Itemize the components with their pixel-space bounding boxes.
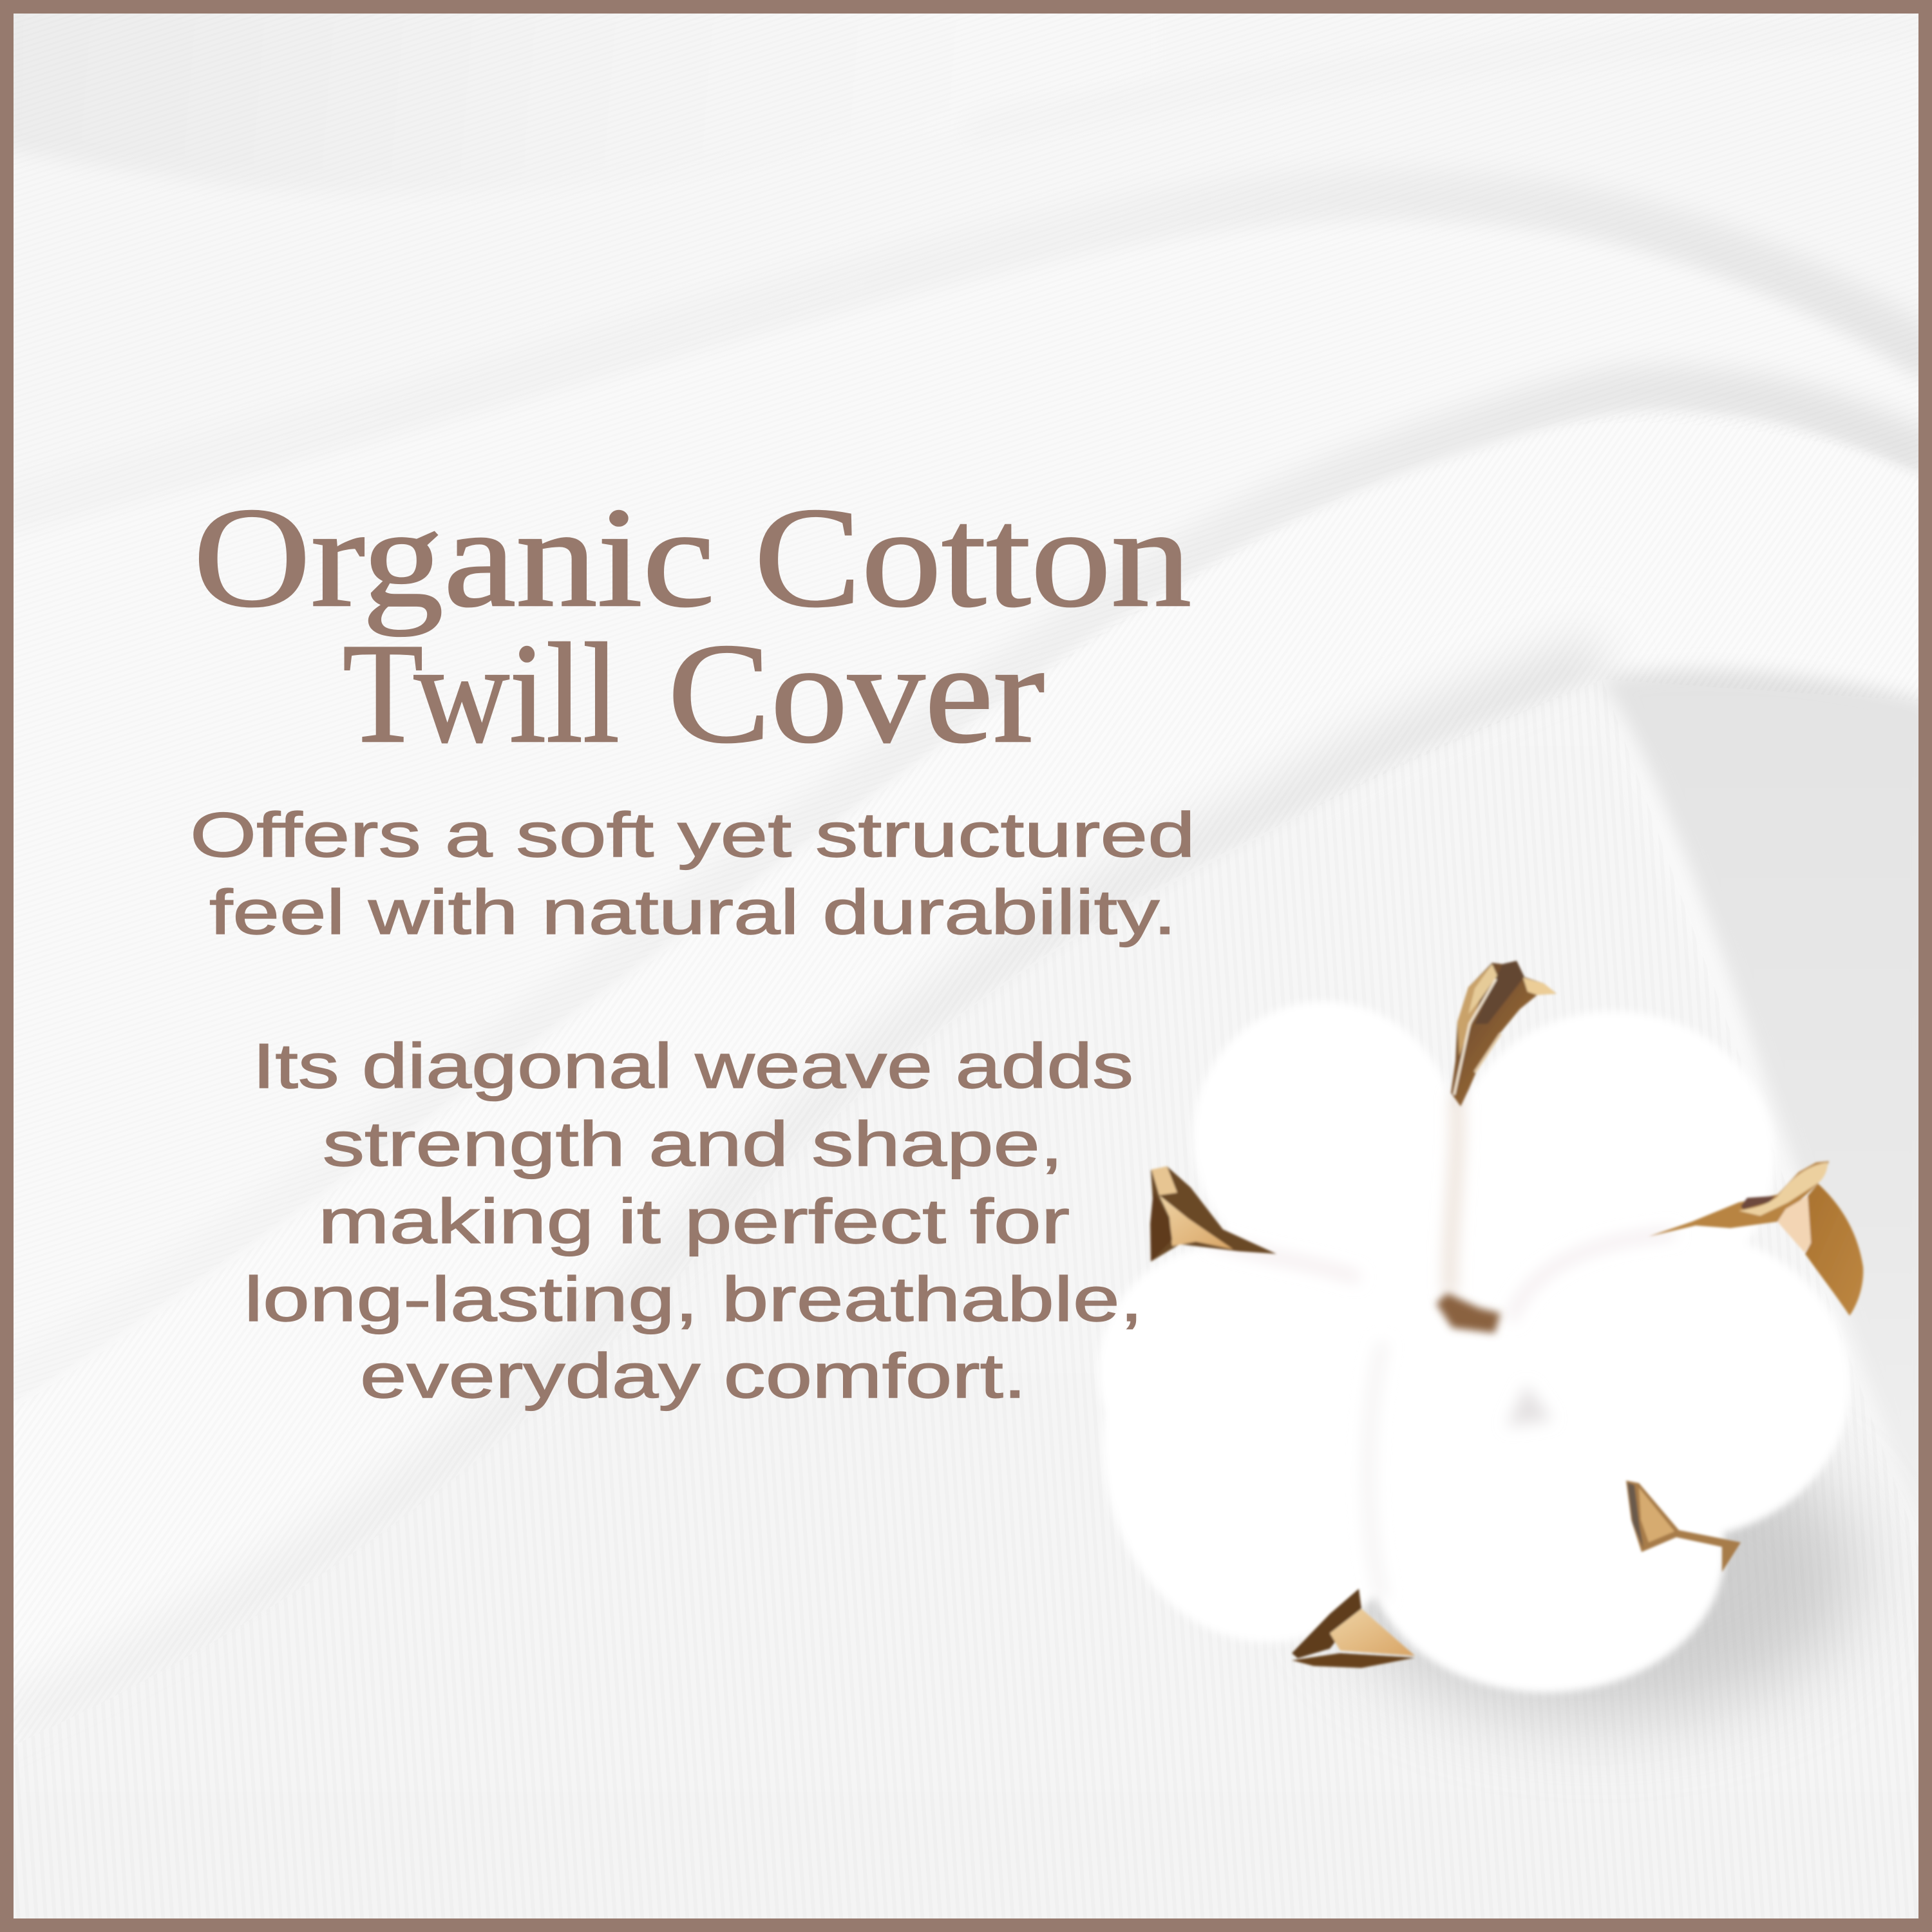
twill weave texture bbox=[0, 0, 1932, 1410]
title: Cotton bbox=[754, 478, 1191, 637]
description text: long-lasting, breathable, bbox=[244, 1264, 1143, 1334]
title: Cover bbox=[668, 614, 1045, 773]
cotton petals bbox=[1098, 1001, 1850, 1692]
intro text: feel with natural durability. bbox=[209, 876, 1177, 947]
description text: strength and shape, bbox=[323, 1108, 1063, 1179]
description text: Its diagonal weave adds bbox=[252, 1030, 1133, 1101]
lower panel shadow bbox=[0, 660, 1602, 1732]
shaded hollow bbox=[1602, 669, 1932, 1591]
cotton boll bbox=[1098, 961, 1863, 1719]
sepal bottom bbox=[1292, 1589, 1415, 1668]
description text: everyday comfort. bbox=[360, 1340, 1027, 1411]
sepal left bbox=[1150, 1166, 1276, 1262]
intro text: Offers a soft yet structured bbox=[190, 799, 1195, 870]
title: Organic bbox=[193, 478, 715, 637]
petal creases bbox=[1450, 1095, 1457, 1294]
ridge shadow bbox=[0, 390, 1932, 1394]
lower fabric panel bbox=[0, 679, 1932, 1932]
title bbox=[193, 478, 1191, 773]
second fold shadow bbox=[0, 198, 1932, 515]
sepal lower right bbox=[1626, 1481, 1741, 1572]
faint top-right crease bbox=[966, 26, 1932, 129]
boll centre bbox=[1436, 1293, 1501, 1333]
description text: making it perfect for bbox=[318, 1186, 1070, 1256]
ridge surface bbox=[0, 413, 1932, 1932]
ridge texture bbox=[0, 413, 1932, 1752]
intro text bbox=[190, 799, 1195, 947]
sepal top bbox=[1451, 961, 1557, 1106]
title: Twill bbox=[343, 614, 620, 773]
upper fabric fold bbox=[0, 0, 1159, 193]
ribbed weave texture bbox=[0, 679, 1932, 1932]
sepal right bbox=[1649, 1161, 1863, 1316]
description text bbox=[244, 1030, 1143, 1411]
cast shadow bbox=[1333, 1423, 1861, 1719]
